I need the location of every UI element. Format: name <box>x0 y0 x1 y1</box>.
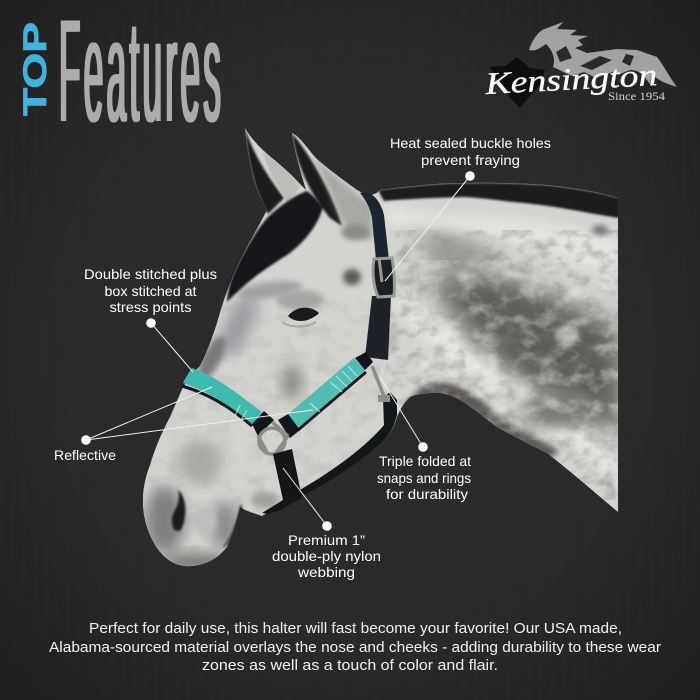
nostril <box>172 490 185 531</box>
noseband teal right <box>287 358 365 428</box>
neck shading <box>385 205 622 490</box>
mottled fur texture <box>385 230 625 500</box>
callout: double stitched: stress points <box>110 299 192 315</box>
description text: zones as well as a touch of color and flair. <box>202 658 498 674</box>
title word: TOP: TOP <box>17 22 53 116</box>
forelock <box>227 191 323 302</box>
label: Triple folded at <box>379 453 471 469</box>
description text <box>49 621 661 674</box>
ear details <box>245 128 372 240</box>
callout: reflective <box>54 387 313 463</box>
leader line <box>385 176 470 281</box>
callout: double stitched: box stitched at <box>104 283 197 299</box>
mane <box>378 183 620 218</box>
leader line <box>151 323 193 372</box>
horse head and neck photo <box>130 120 630 580</box>
buckle <box>373 258 394 297</box>
label: Double stitched plus <box>84 266 217 282</box>
face shading <box>145 224 369 571</box>
callout: triple folded: for durability <box>386 486 468 502</box>
plaid detail <box>235 366 357 420</box>
label: Premium 1” <box>288 532 365 548</box>
callout: premium webbing: webbing <box>297 564 355 580</box>
noseband keepers <box>252 352 373 438</box>
logo horse <box>529 22 677 87</box>
leader line <box>380 377 423 447</box>
title: Top Features <box>17 0 224 132</box>
leader line <box>283 468 327 526</box>
halter <box>182 192 397 514</box>
ring hardware <box>258 422 288 454</box>
horse coat <box>130 120 630 580</box>
logo wordmark: Kensington <box>483 57 658 101</box>
mouth shading <box>222 505 242 548</box>
callout: heat sealed buckle holes <box>385 135 551 281</box>
logo shield <box>490 57 545 108</box>
noseband trim <box>182 372 366 430</box>
leader lines <box>86 387 313 440</box>
noseband teal left <box>183 368 262 424</box>
callout: triple folded <box>377 377 471 502</box>
label: Reflective <box>54 447 116 463</box>
eye <box>282 308 319 326</box>
chin strap <box>262 449 302 514</box>
callout: premium webbing <box>272 468 381 580</box>
callout: triple folded: snaps and rings <box>377 470 471 486</box>
callout: premium webbing: double-ply nylon <box>272 548 381 564</box>
callout: double stitched <box>84 266 217 372</box>
logo: Kensington <box>483 22 677 108</box>
label: Heat sealed buckle holes <box>390 135 551 151</box>
callout: heat sealed buckle holes: prevent fraying <box>421 152 520 168</box>
logo tagline: Since 1954 <box>608 91 665 103</box>
description text: Perfect for daily use, this halter will fast become your favorite! Our USA made, <box>89 621 622 637</box>
snap hardware <box>372 366 384 396</box>
cheek strap <box>365 296 391 360</box>
description text: Alabama-sourced material overlays the nose and cheeks - adding durability to these wear <box>49 640 661 656</box>
crown strap <box>360 192 389 260</box>
